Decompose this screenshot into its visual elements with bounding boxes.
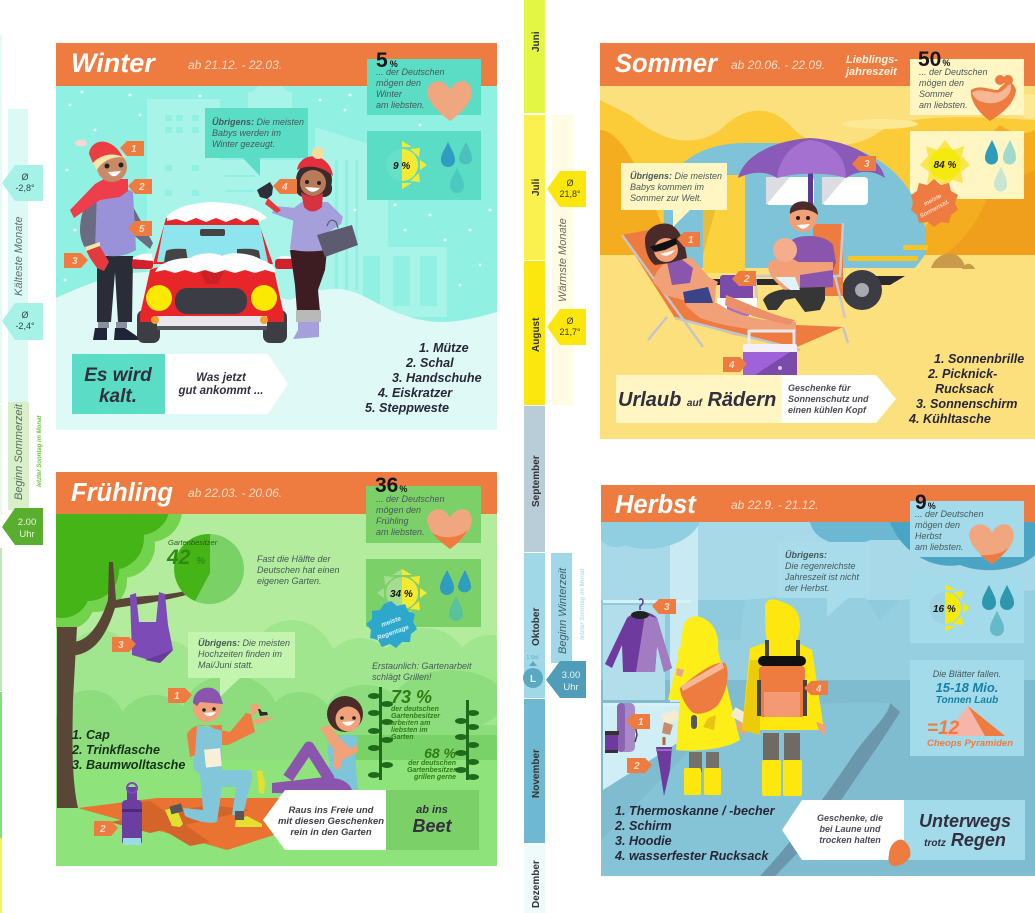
ground: [600, 255, 1035, 439]
arrow and headline box: Geschenke, die: [817, 813, 883, 823]
speech bubble: Jahreszeit ist nicht: [784, 572, 860, 582]
arrow and headline box: trocken halten: [819, 835, 881, 845]
header: [56, 472, 497, 514]
speech bubble: Übrigens: Die meisten: [212, 117, 304, 127]
favourite box: [367, 49, 481, 121]
left edge month strip: [0, 35, 2, 913]
hoodie: [605, 599, 672, 672]
tag: 21,8: Ø: [566, 178, 574, 188]
month labels: November: [531, 749, 542, 798]
weather box: [366, 559, 481, 627]
note: gardening beats grilling: schlägt Grillen!: [372, 672, 432, 682]
icon: heart: [969, 524, 1014, 564]
umbrella: [656, 737, 672, 796]
cooler: [743, 331, 797, 375]
arrow and headline box: Raus ins Freie und: [288, 805, 374, 816]
item tags: 1: [638, 717, 644, 728]
weather box: [367, 131, 481, 200]
favourite box: Herbst: [915, 531, 942, 541]
favourite box: 50%: [918, 48, 950, 71]
icon: heart: [427, 81, 472, 121]
leaves stat box: Cheops Pyramiden: [927, 738, 1013, 749]
arrow and headline box: [782, 800, 1025, 866]
item tags: 3: [118, 640, 124, 651]
favourite box: Frühling: [376, 516, 409, 526]
gift list: 3. Sonnenschirm: [916, 397, 1017, 411]
gift list: 2. Schal: [405, 356, 454, 370]
tag: 2.00 Uhr: [2, 508, 43, 545]
speech bubble: [205, 108, 308, 176]
stat: 73 percent: der deutschen: [391, 706, 439, 713]
stat: 73 percent: liebsten im: [391, 727, 428, 734]
pie chart: Gartenbesitzer: Gartenbesitzer: [168, 538, 218, 547]
label: letzter Sonntag im Monat: letzter Sonntag im Monat: [580, 568, 586, 640]
stat: 68 percent: 68 %: [424, 745, 457, 761]
label: Wärmste Monate: Wärmste Monate: [557, 218, 569, 302]
gardener: [165, 688, 275, 827]
favourite box: mögen den: [376, 505, 421, 515]
stat: 68 percent: Gartenbesitzer: [407, 767, 457, 774]
item tags: 3: [72, 256, 78, 267]
label: Beginn Sommerzeit: Beginn Sommerzeit: [13, 403, 25, 500]
gift list: [614, 804, 776, 863]
city and rain background: [601, 520, 1035, 876]
gift list: 3. Handschuhe: [392, 371, 482, 385]
leaves stat box: Tonnen Laub: [936, 695, 998, 706]
bag on branch: [130, 592, 173, 663]
arrow and headline box: bei Laune und: [819, 824, 881, 834]
sunbathing woman: [645, 223, 796, 331]
stat: 68 percent: [407, 748, 456, 780]
arrow and headline box: mit diesen Geschenken: [278, 816, 384, 827]
gift list: 4. wasserfester Rucksack: [614, 849, 769, 863]
headline box: gut ankommt ...: [178, 385, 263, 397]
man with baby: [763, 201, 836, 312]
month labels: August: [531, 317, 542, 352]
favourite box: 5%: [376, 49, 398, 72]
headline arrow: einen kühlen Kopf: [788, 405, 867, 415]
item tags: 4: [815, 684, 822, 695]
label: Lieblingsjahreszeit: [844, 54, 898, 78]
favourite box: am liebsten.: [915, 542, 964, 552]
hills: [55, 620, 530, 866]
speech bubble: Babys kommen im: [630, 182, 705, 192]
gift list: 2. Schirm: [614, 819, 672, 833]
favourite box: mögen den: [919, 78, 964, 88]
gift list: 4. Kühltasche: [908, 412, 991, 426]
tag: 3.00 Uhr: Uhr: [563, 682, 579, 693]
label: Kälteste Monate: Kälteste Monate: [13, 216, 25, 296]
title: Sommer: [615, 50, 719, 78]
weather box: [910, 574, 1024, 643]
stat: 73 percent: [391, 690, 440, 739]
icon: clock: [523, 655, 543, 688]
arrow and headline box: Unterwegs: [919, 811, 1011, 831]
speech bubble: Sommer zur Welt.: [630, 193, 702, 203]
icon: rain drops: [440, 570, 471, 621]
headline arrow: Urlaub auf Rädern: [618, 389, 776, 411]
headline arrow: Sonnenschutz und: [788, 394, 869, 404]
item tags: 2: [138, 182, 145, 193]
favourite box: ... der Deutschen: [919, 67, 988, 77]
tag: 21,7: [547, 309, 586, 345]
speech bubble: [777, 542, 870, 617]
tag: -2,8: Ø: [21, 172, 29, 182]
person with backpack: [742, 599, 826, 796]
gift list: [365, 341, 482, 415]
tag: -2,8: [2, 165, 43, 201]
month timeline: [523, 0, 545, 913]
badge: meiste Sonnenstd.: meiste: [923, 193, 943, 208]
item tags: 2: [99, 824, 106, 835]
headline arrow: Geschenke für: [788, 383, 851, 393]
sidebar: warmest months: [547, 115, 586, 405]
item tags: 1: [131, 144, 137, 155]
bag: [717, 275, 757, 316]
headline box: [72, 354, 288, 414]
gift list: 1. Cap: [72, 728, 110, 742]
city background: [147, 83, 447, 317]
speech bubble: [621, 163, 727, 227]
favourite box: 9%: [915, 491, 936, 514]
speech bubble: Übrigens: Die meisten: [630, 171, 722, 181]
panel: Winter: [56, 43, 497, 430]
month labels: Juni: [531, 31, 542, 52]
item tags: [64, 141, 297, 268]
icon: pyramid: [944, 706, 1005, 736]
item tags: 1: [688, 235, 694, 246]
item tags: [94, 637, 192, 836]
label: Lieblingsjahreszeit: Lieblings-: [846, 54, 898, 66]
tag: 21,7: Ø: [566, 316, 574, 326]
weather box: [910, 131, 1024, 199]
snow dots: [64, 90, 492, 286]
tag: -2,8: -2,8°: [15, 183, 35, 193]
header: [600, 43, 1035, 86]
tag: 21,8: [547, 171, 586, 207]
icon: heart: [427, 509, 472, 549]
tag: 21,8: 21,8°: [559, 189, 581, 199]
month labels: September: [531, 455, 542, 507]
headline box: Es wird: [84, 365, 152, 386]
note: half of Germans: eigenen Garten.: [257, 576, 322, 586]
tag: -2,4: Ø: [21, 310, 29, 320]
item tags: 5: [139, 224, 145, 235]
icon: leaf: [888, 840, 911, 866]
leaves stat box: Die Blätter fallen.: [933, 669, 1001, 679]
speech bubble: Winter gezeugt.: [212, 139, 275, 149]
date: ab 20.06. - 22.09.: [731, 58, 825, 72]
icon: heart: [971, 82, 1016, 121]
snow ground: [56, 272, 497, 430]
pie chart: Gartenbesitzer: 42 %: [166, 546, 205, 569]
stat: 73 percent: 73 %: [391, 687, 432, 707]
favourite box: [910, 491, 1024, 564]
gift list: Rucksack: [935, 382, 995, 396]
stat: 73 percent: arbeiten am: [391, 720, 430, 727]
item tags: 4: [281, 182, 288, 193]
speech bubble: Die regenreichste: [785, 561, 856, 571]
gift list: 2. Picknick-: [927, 367, 997, 381]
speech bubble: der Herbst.: [785, 583, 830, 593]
car: [132, 202, 295, 343]
favourite box: [910, 48, 1024, 121]
gift list: 1. Sonnenbrille: [934, 352, 1024, 366]
seated woman: [257, 696, 363, 794]
stat: 73 percent: Gartenbesitzer: [391, 713, 441, 720]
arrow and headline box: ab ins: [416, 804, 448, 816]
stat: 68 percent: der deutschen: [408, 760, 456, 767]
icon: rain drops: [985, 140, 1016, 192]
gift list: 1. Thermoskanne / -becher: [615, 804, 776, 818]
favourite box: ... der Deutschen: [376, 494, 445, 504]
arrow: [165, 354, 288, 414]
item tags: 3: [864, 159, 870, 170]
favourite box: 36%: [375, 474, 407, 497]
favourite box: Sommer: [919, 89, 954, 99]
headline box: Was jetzt: [196, 372, 247, 384]
header: [601, 485, 1035, 522]
item tags: 2: [743, 274, 750, 285]
favourite box: am liebsten.: [376, 100, 425, 110]
label: Beginn Winterzeit: Beginn Winterzeit: [557, 567, 569, 654]
speech bubble: Babys werden im: [212, 128, 282, 138]
tag: 3.00 Uhr: [546, 661, 586, 698]
person with sling: [661, 616, 748, 795]
header: [56, 43, 497, 86]
leaves stat box: [910, 660, 1024, 756]
headline arrow: [616, 375, 896, 423]
item tags: 3: [664, 602, 670, 613]
month labels: Oktober: [531, 608, 542, 646]
gift list: 2. Trinkflasche: [71, 743, 160, 757]
badge: meiste Regentage: meiste: [380, 615, 402, 629]
arrow and headline box: rein in den Garten: [290, 827, 372, 838]
arrow and headline box: trotz Regen: [924, 830, 1006, 850]
clouds: [601, 522, 1035, 570]
favourite box: mögen den: [376, 78, 421, 88]
gift list: [908, 352, 1024, 426]
icon: sun 16%: 16 %: [933, 604, 956, 615]
note: half of Germans: Fast die Hälfte der: [257, 554, 332, 564]
gift list: [71, 728, 185, 772]
tag: -2,4: -2,4°: [15, 321, 35, 331]
bottle: [122, 783, 142, 845]
speech bubble: Übrigens: Die meisten: [198, 638, 290, 648]
woman with scraper: [257, 147, 358, 339]
icon: rain drops: [441, 142, 472, 193]
arrow and headline box: Beet: [412, 816, 453, 836]
title: Frühling: [71, 479, 173, 507]
icon: sun 9%: 9 %: [393, 161, 410, 172]
badge: meiste Regentage: Regentage: [376, 624, 410, 642]
favourite box: am liebsten.: [376, 527, 425, 537]
tag: 3.00 Uhr: 3.00: [562, 670, 580, 681]
gift list: 1. Mütze: [419, 341, 469, 355]
icon: clock: L: [530, 674, 536, 685]
item tags: 4: [728, 360, 735, 371]
man: [70, 140, 153, 340]
item tags: [626, 599, 828, 773]
vines: [368, 687, 479, 780]
favourite box: ... der Deutschen: [376, 67, 445, 77]
pie chart: Gartenbesitzer: [166, 534, 244, 604]
label: letzter Sonntag im Monat: letzter Sonntag im Monat: [37, 415, 43, 487]
date: ab 22.9. - 21.12.: [731, 498, 818, 512]
favourite box: ... der Deutschen: [915, 509, 984, 519]
mountains: [600, 94, 1035, 262]
badge: meiste Sonnenstd.: [911, 179, 958, 227]
speech bubble: Hochzeiten finden im: [198, 649, 283, 659]
sidebar: coldest months: [2, 109, 43, 402]
label: Lieblingsjahreszeit: jahreszeit: [844, 66, 898, 78]
rocks: [931, 253, 975, 269]
stat: 68 percent: grillen gerne: [413, 774, 456, 781]
item tags: 2: [633, 761, 640, 772]
item tags: 1: [174, 691, 180, 702]
month labels: [531, 31, 542, 908]
icon: sun 84%: 84 %: [934, 160, 957, 171]
badge: meiste Sonnenstd.: Sonnenstd.: [919, 199, 951, 220]
tag: 2.00 Uhr: 2.00: [18, 517, 36, 528]
favourite box: am liebsten.: [919, 100, 968, 110]
thermos and cup: [605, 703, 637, 753]
speech bubble: Übrigens:: [785, 550, 827, 560]
gift list: 5. Steppweste: [365, 401, 449, 415]
panel: Herbst: [601, 485, 1035, 876]
lounger: [622, 223, 848, 350]
tag: 21,7: 21,7°: [559, 327, 581, 337]
icon: rain drops: [982, 585, 1014, 636]
date: ab 22.03. - 20.06.: [188, 486, 282, 500]
stat: 73 percent: Garten: [391, 734, 414, 741]
favourite box: mögen den: [915, 520, 960, 530]
leaves stat box: =12: [927, 718, 960, 739]
date: ab 21.12. - 22.03.: [188, 58, 282, 72]
tree: [56, 514, 186, 808]
headline box: kalt.: [99, 386, 137, 407]
tag: 2.00 Uhr: Uhr: [19, 529, 35, 540]
badge: meiste Regentage: [366, 601, 417, 648]
speech bubble: [188, 632, 295, 697]
month labels: Juli: [531, 179, 542, 196]
favourite box: Winter: [376, 89, 403, 99]
item tags: [677, 156, 876, 372]
gift list: 3. Baumwolltasche: [72, 758, 185, 772]
gift list: 4. Eiskratzer: [377, 386, 453, 400]
panel: Sommer: [600, 43, 1035, 439]
note: gardening beats grilling: [372, 661, 472, 682]
picnic blanket: [78, 798, 290, 850]
speech bubble: Mai/Juni statt.: [198, 660, 254, 670]
arrow and headline box: [263, 790, 479, 850]
note: gardening beats grilling: Erstaunlich: Gartenarbeit: [372, 661, 472, 671]
note: half of Germans: Deutschen hat einen: [257, 565, 340, 575]
road: [601, 702, 900, 876]
trailer: [663, 143, 928, 310]
month labels: Dezember: [531, 860, 542, 908]
sidebar: summer time start: [2, 402, 43, 545]
note: half of Germans: [257, 554, 340, 586]
tag: -2,4: [2, 303, 43, 340]
umbrella: [738, 138, 885, 210]
gift list: 3. Hoodie: [615, 834, 672, 848]
leaves stat box: 15-18 Mio.: [936, 680, 998, 695]
favourite box: [366, 474, 481, 549]
title: Herbst: [615, 491, 697, 519]
icon: clock: 1 Std.: [526, 655, 540, 661]
panel: Frühling: [56, 472, 497, 866]
sidebar: winter time start: [546, 553, 586, 698]
icon: sun 34%: 34 %: [390, 589, 413, 600]
title: Winter: [71, 48, 156, 78]
